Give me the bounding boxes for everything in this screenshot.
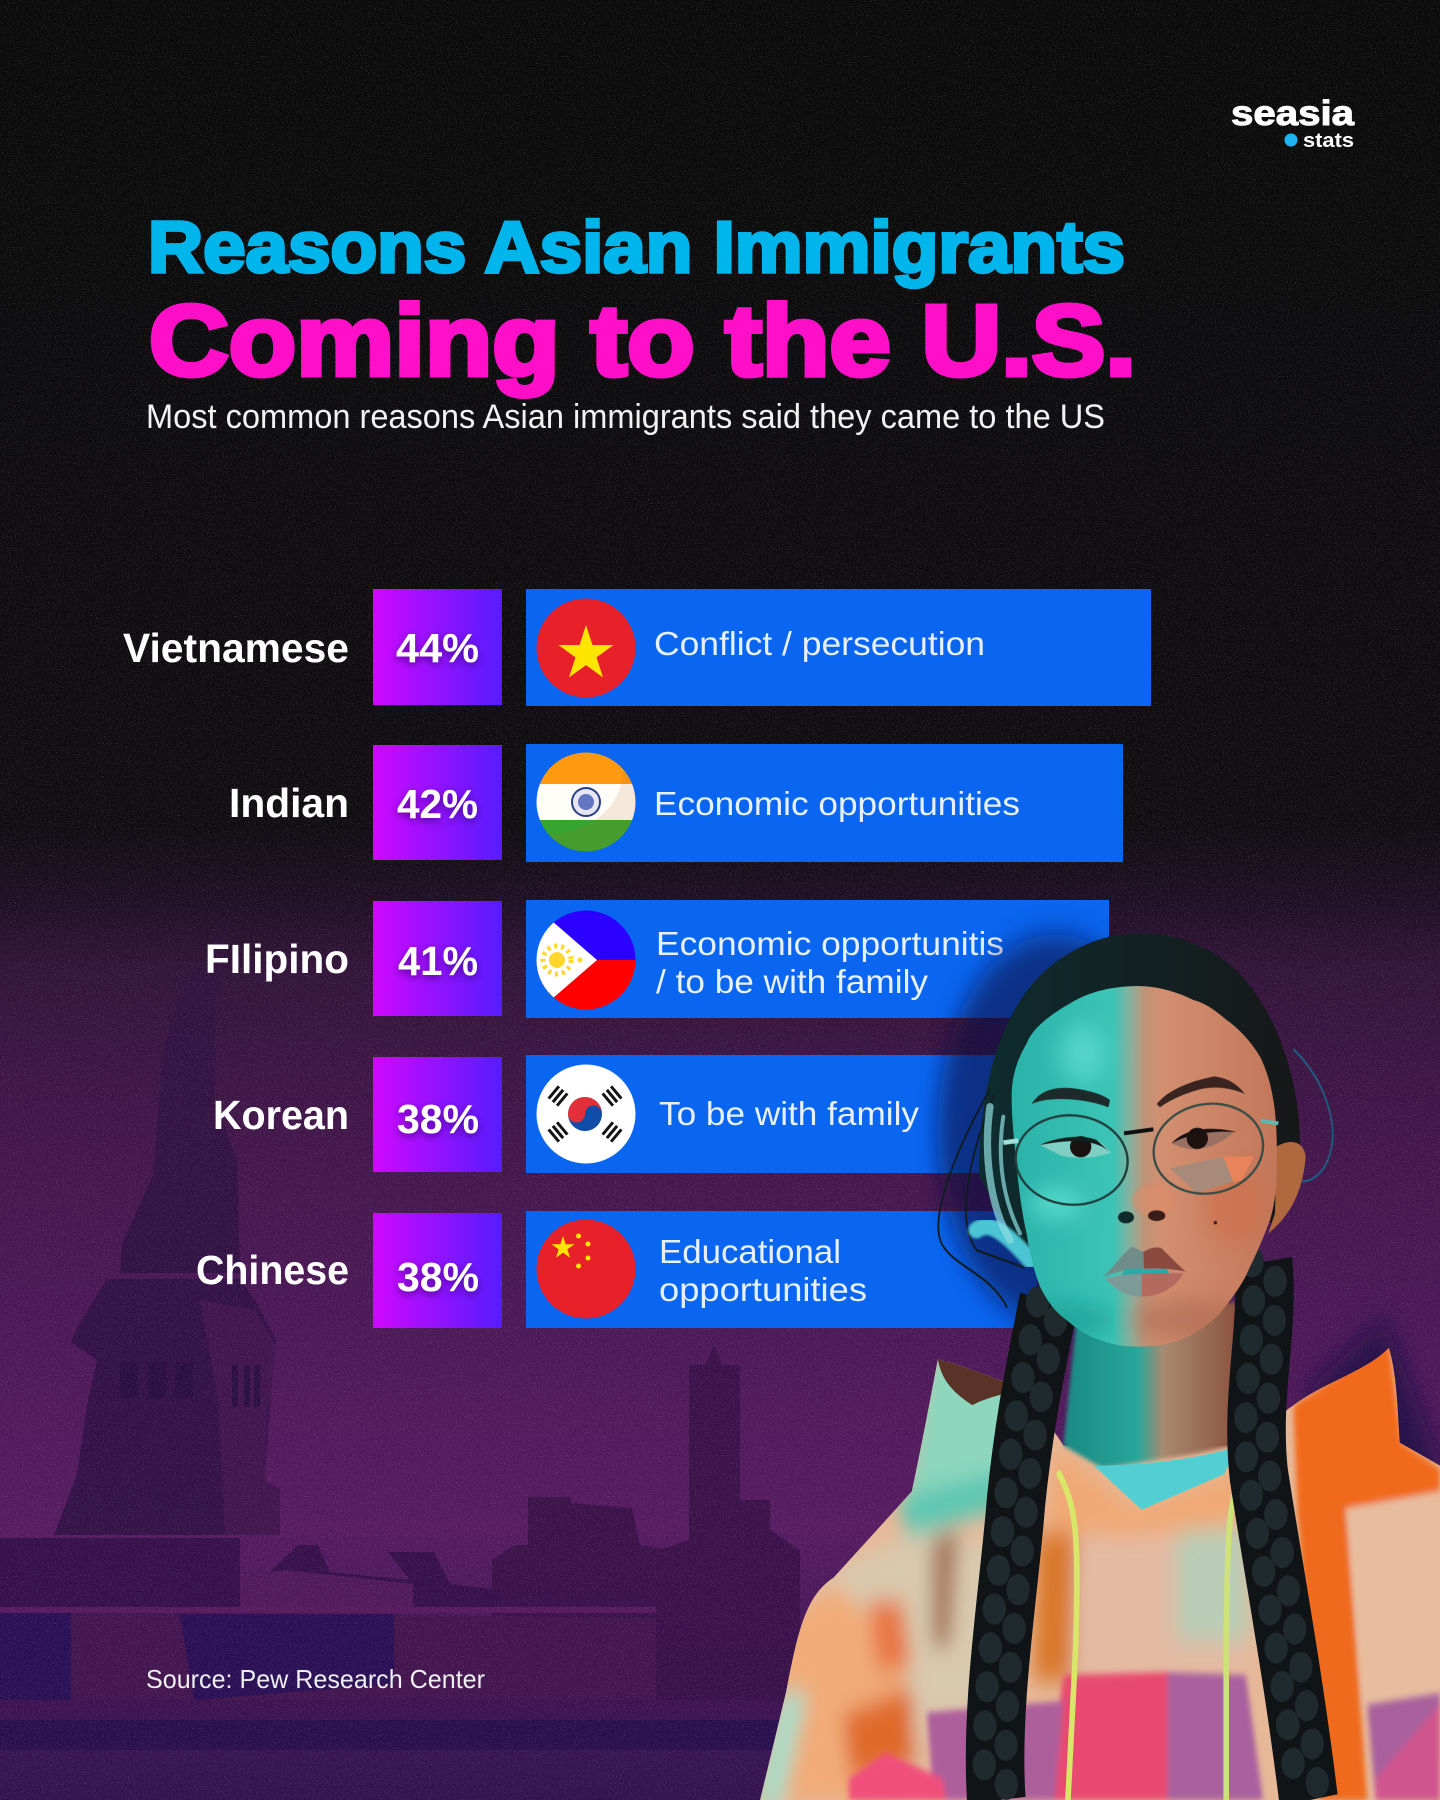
flag: Philippines — [536, 910, 636, 1010]
girl shadow — [938, 934, 1440, 1532]
label: Filipino: FIlipino — [205, 936, 349, 982]
pedestal right face — [200, 1300, 280, 1535]
title line 1: Reasons Asian Immigrants — [148, 208, 1125, 288]
wall top highlight — [0, 1607, 656, 1613]
reason bar: conflict — [526, 589, 1151, 706]
eyebrows — [1032, 1077, 1245, 1107]
water dark band — [0, 1720, 800, 1750]
pedestal windows — [120, 1362, 260, 1407]
flag: China — [536, 1220, 636, 1318]
hoodie — [756, 1342, 1440, 1800]
label: Vietnamese: Vietnamese — [123, 625, 349, 671]
flag: Vietnam — [536, 598, 636, 698]
label: Indian: Indian — [229, 780, 349, 826]
reason bar: family: To be with family — [659, 1095, 920, 1132]
reason bar: economic and family: / to be with family — [656, 963, 929, 1000]
percentage box: 41%: 41% — [398, 938, 478, 984]
label: Chinese: Chinese — [196, 1247, 349, 1293]
row: Korean — [213, 1055, 996, 1173]
reason bar: family — [526, 1055, 996, 1173]
percentage box: 38% — [373, 1057, 502, 1172]
hood inner left — [938, 1359, 1025, 1405]
title line 2: Coming to the U.S. — [149, 285, 1136, 397]
reason bar: economic — [526, 744, 1123, 862]
face — [1012, 986, 1277, 1347]
label: Korean: Korean — [213, 1092, 349, 1138]
reason bar: education — [526, 1211, 1037, 1328]
lips — [1103, 1247, 1186, 1297]
reason bar: education: opportunities — [659, 1271, 867, 1308]
right lens tint — [1170, 1157, 1254, 1193]
right braid — [1246, 1262, 1319, 1800]
flag: South Korea — [536, 1064, 636, 1164]
t-shirt collar — [1094, 1447, 1237, 1510]
face light and shade — [1020, 1023, 1263, 1340]
reason bar: economic: Economic opportunities — [654, 785, 1020, 822]
glasses — [1003, 1095, 1278, 1208]
pedestal — [54, 1279, 280, 1535]
statue figure — [120, 917, 240, 1273]
percentage box: 38% — [373, 1213, 502, 1328]
row: Indian — [229, 744, 1123, 862]
fort lighter block — [240, 1538, 413, 1612]
source note: Source: Pew Research Center — [146, 1664, 485, 1694]
shoreline — [0, 1700, 800, 1720]
flag: India — [536, 752, 636, 852]
neck — [1064, 1302, 1237, 1468]
percentage box: 42% — [373, 745, 502, 860]
reason bar: economic and family: Economic opportunitis — [656, 925, 1004, 962]
hair — [979, 933, 1300, 1267]
small dark roofs — [270, 1545, 500, 1612]
percentage box: 42%: 42% — [397, 781, 478, 827]
eyes — [1040, 1128, 1237, 1158]
percentage box: 38%: 38% — [397, 1254, 479, 1300]
portrait face layer — [977, 986, 1306, 1347]
percentage box: 41% — [373, 901, 502, 1016]
reason bar: economic and family — [526, 900, 1109, 1018]
reason bar: education: Educational — [659, 1233, 841, 1270]
percentage box: 38%: 38% — [397, 1096, 479, 1142]
percentage box: 44% — [373, 589, 502, 705]
logo: seasia stats: stats — [1303, 130, 1354, 152]
row: Filipino — [205, 900, 1109, 1018]
logo: seasia stats — [1231, 94, 1355, 152]
hair highlight strands — [977, 1107, 1030, 1260]
subtitle: Most common reasons Asian immigrants said they came to the US — [146, 398, 1105, 436]
drawstrings — [1059, 1474, 1239, 1800]
row: Chinese — [196, 1211, 1037, 1328]
portrait: young woman with glasses and braids — [756, 933, 1440, 1800]
logo: seasia stats: seasia — [1231, 94, 1355, 133]
fort wall — [0, 1610, 656, 1700]
ear — [1268, 1142, 1306, 1233]
left braid — [984, 1302, 1059, 1800]
skyline buildings — [492, 1345, 800, 1700]
background photo: Statue of Liberty and skyline — [0, 917, 800, 1750]
reason bar: conflict: Conflict / persecution — [654, 625, 985, 662]
loose hair strands — [938, 1049, 1333, 1308]
row: Vietnamese — [123, 589, 1151, 706]
portrait body layer — [756, 933, 1440, 1800]
nose — [1118, 1184, 1217, 1224]
percentage box: 44%: 44% — [396, 625, 479, 671]
fort upper wall — [0, 1538, 283, 1610]
wall shadows — [0, 1612, 394, 1700]
